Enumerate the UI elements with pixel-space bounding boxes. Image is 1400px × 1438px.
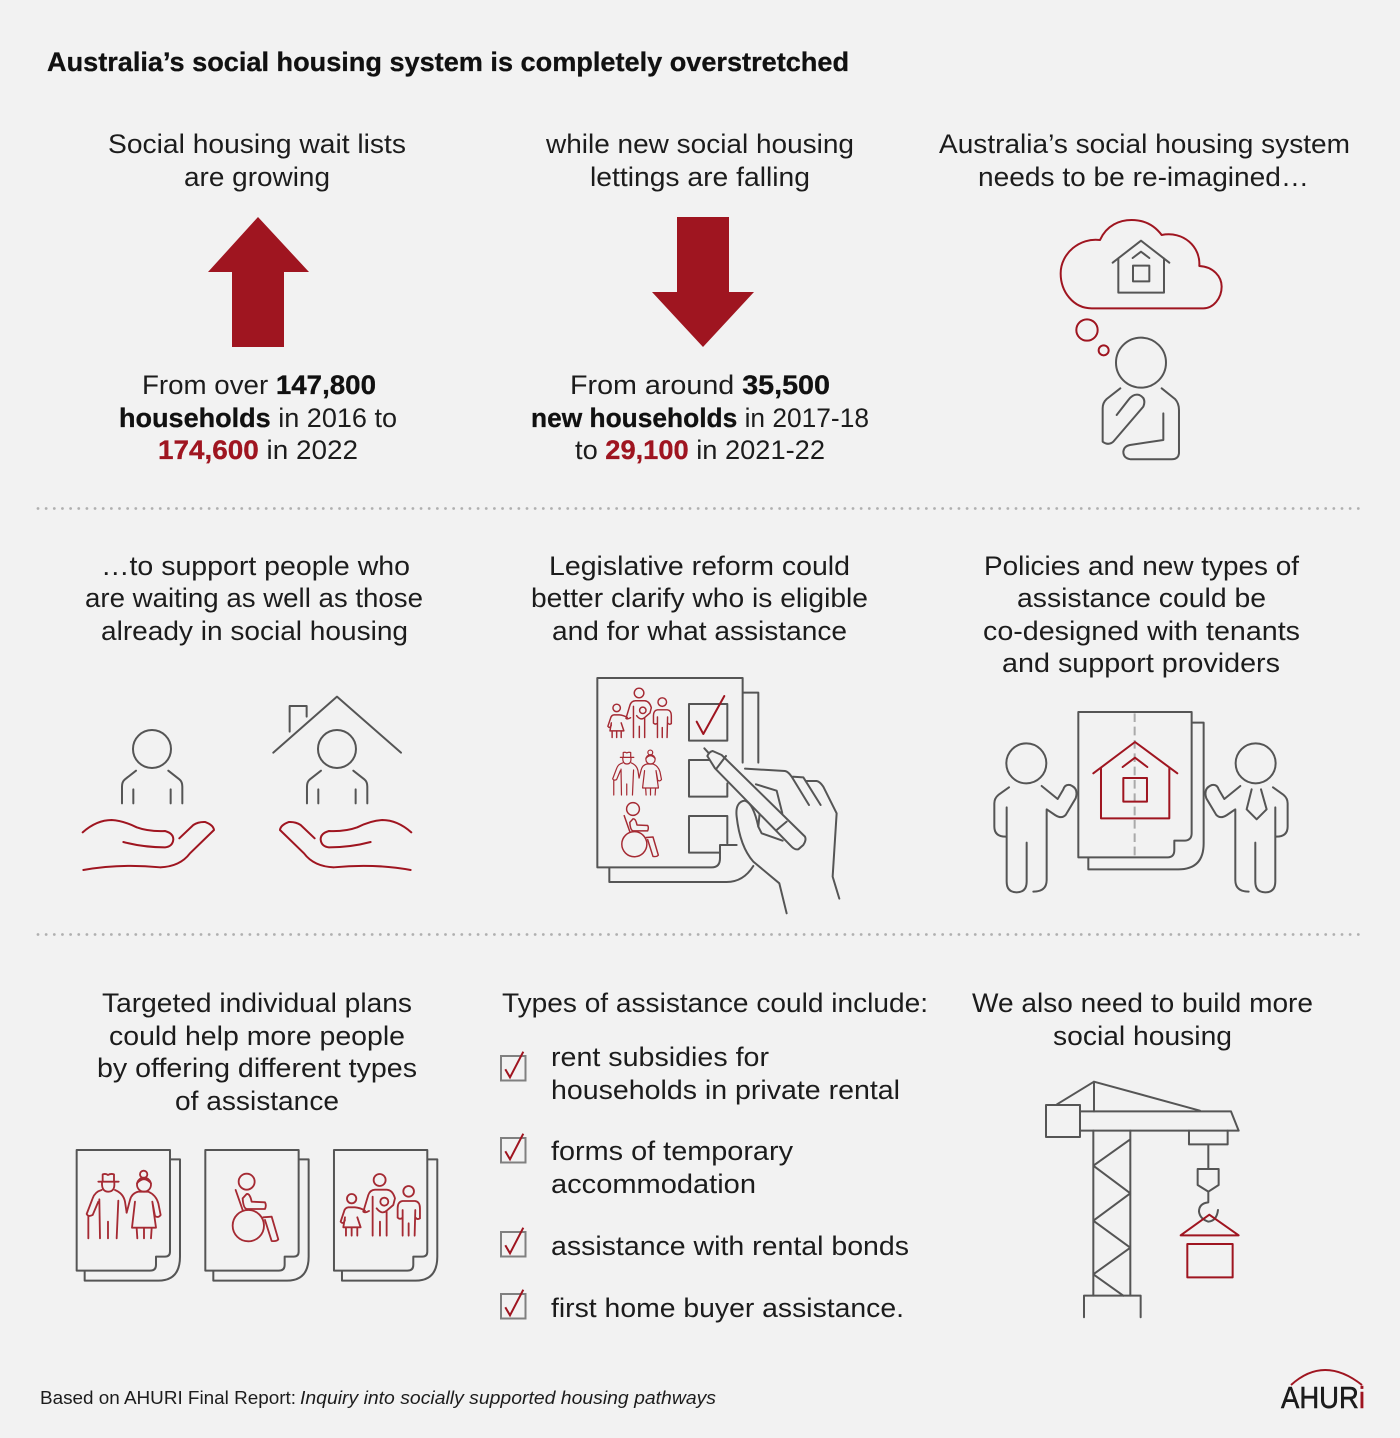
logo: AHURI: AHURi <box>1281 1380 1365 1415</box>
icon: checklist with hand and pen <box>597 678 839 913</box>
icon: elderly couple plan <box>77 1150 180 1281</box>
text block: lettings figures <box>531 370 869 465</box>
heading: individual plans: Targeted individual plans <box>102 988 412 1018</box>
icon: crane lifting a house <box>1046 1082 1239 1317</box>
heading: legislative reform: better clarify who is eligible <box>531 583 868 613</box>
arrow: down <box>652 217 754 347</box>
heading: co-design <box>983 551 1300 678</box>
heading: build more: social housing <box>1053 1021 1232 1051</box>
heading: support people: are waiting as well as those <box>85 583 423 613</box>
heading: wait lists: Social housing wait lists <box>108 129 406 159</box>
list item: temporary accommodation <box>501 1134 794 1199</box>
icon: housed person in open hand <box>273 697 411 870</box>
heading: co-design: assistance could be <box>1017 583 1266 613</box>
heading: re-imagined: needs to be re-imagined… <box>978 162 1309 192</box>
text block: wait list figures <box>119 370 397 465</box>
heading: individual plans: by offering different types <box>97 1053 417 1083</box>
heading: individual plans: could help more people <box>109 1021 405 1051</box>
text block: lettings figures: to 29,100 in 2021-22 <box>575 435 825 465</box>
heading: co-design: co-designed with tenants <box>983 616 1300 646</box>
heading: legislative reform: and for what assistance <box>552 616 847 646</box>
text block: wait list figures: 174,600 in 2022 <box>158 435 358 465</box>
heading: legislative reform <box>531 551 868 646</box>
text block: lettings figures: new households in 2017-18 <box>531 403 869 433</box>
heading: wait lists <box>108 129 406 192</box>
list item: first home buyer: first home buyer assistance. <box>551 1293 904 1323</box>
heading: build more <box>972 988 1313 1051</box>
text block: wait list figures: households in 2016 to <box>119 403 397 433</box>
icon: family plan <box>334 1150 437 1281</box>
heading: individual plans: of assistance <box>175 1086 339 1116</box>
list item: temporary accommodation: accommodation <box>551 1169 756 1199</box>
heading: build more: We also need to build more <box>972 988 1313 1018</box>
source note: Inquiry into socially supported housing pathways <box>300 1388 716 1408</box>
heading: support people <box>85 551 423 646</box>
heading: co-design: and support providers <box>1002 648 1280 678</box>
list item: rental bonds: assistance with rental bonds <box>551 1231 909 1261</box>
text block: lettings figures: From around 35,500 <box>570 370 830 400</box>
heading: legislative reform: Legislative reform could <box>549 551 850 581</box>
source note: Based on AHURI Final Report: <box>40 1388 296 1408</box>
heading: individual plans <box>97 988 417 1116</box>
text block: wait list figures: From over 147,800 <box>142 370 376 400</box>
heading: re-imagined: Australia’s social housing system <box>939 129 1350 159</box>
heading: support people: already in social housing <box>101 616 408 646</box>
icon: person in open hand <box>83 730 214 870</box>
list item: rent subsidies: households in private rental <box>551 1075 900 1105</box>
icon: two people co-designing a house plan <box>994 712 1288 892</box>
heading: re-imagined <box>939 129 1350 192</box>
list item: temporary accommodation: forms of temporary <box>551 1136 794 1166</box>
heading: types of assistance: Types of assistance could include: <box>502 988 928 1018</box>
list item: rent subsidies: rent subsidies for <box>551 1042 769 1072</box>
heading: co-design: Policies and new types of <box>984 551 1300 581</box>
title: Australia’s social housing system is completely overstretched <box>47 47 849 77</box>
icon: wheelchair user plan <box>205 1150 309 1281</box>
list item: rent subsidies <box>501 1042 900 1105</box>
heading: wait lists: are growing <box>184 162 330 192</box>
source note <box>40 1388 716 1408</box>
icon: person thinking of a house <box>1061 220 1222 459</box>
heading: lettings: lettings are falling <box>590 162 810 192</box>
heading: support people: …to support people who <box>101 551 410 581</box>
arrow: up <box>208 217 309 347</box>
heading: lettings <box>545 129 854 192</box>
heading: lettings: while new social housing <box>545 129 854 159</box>
